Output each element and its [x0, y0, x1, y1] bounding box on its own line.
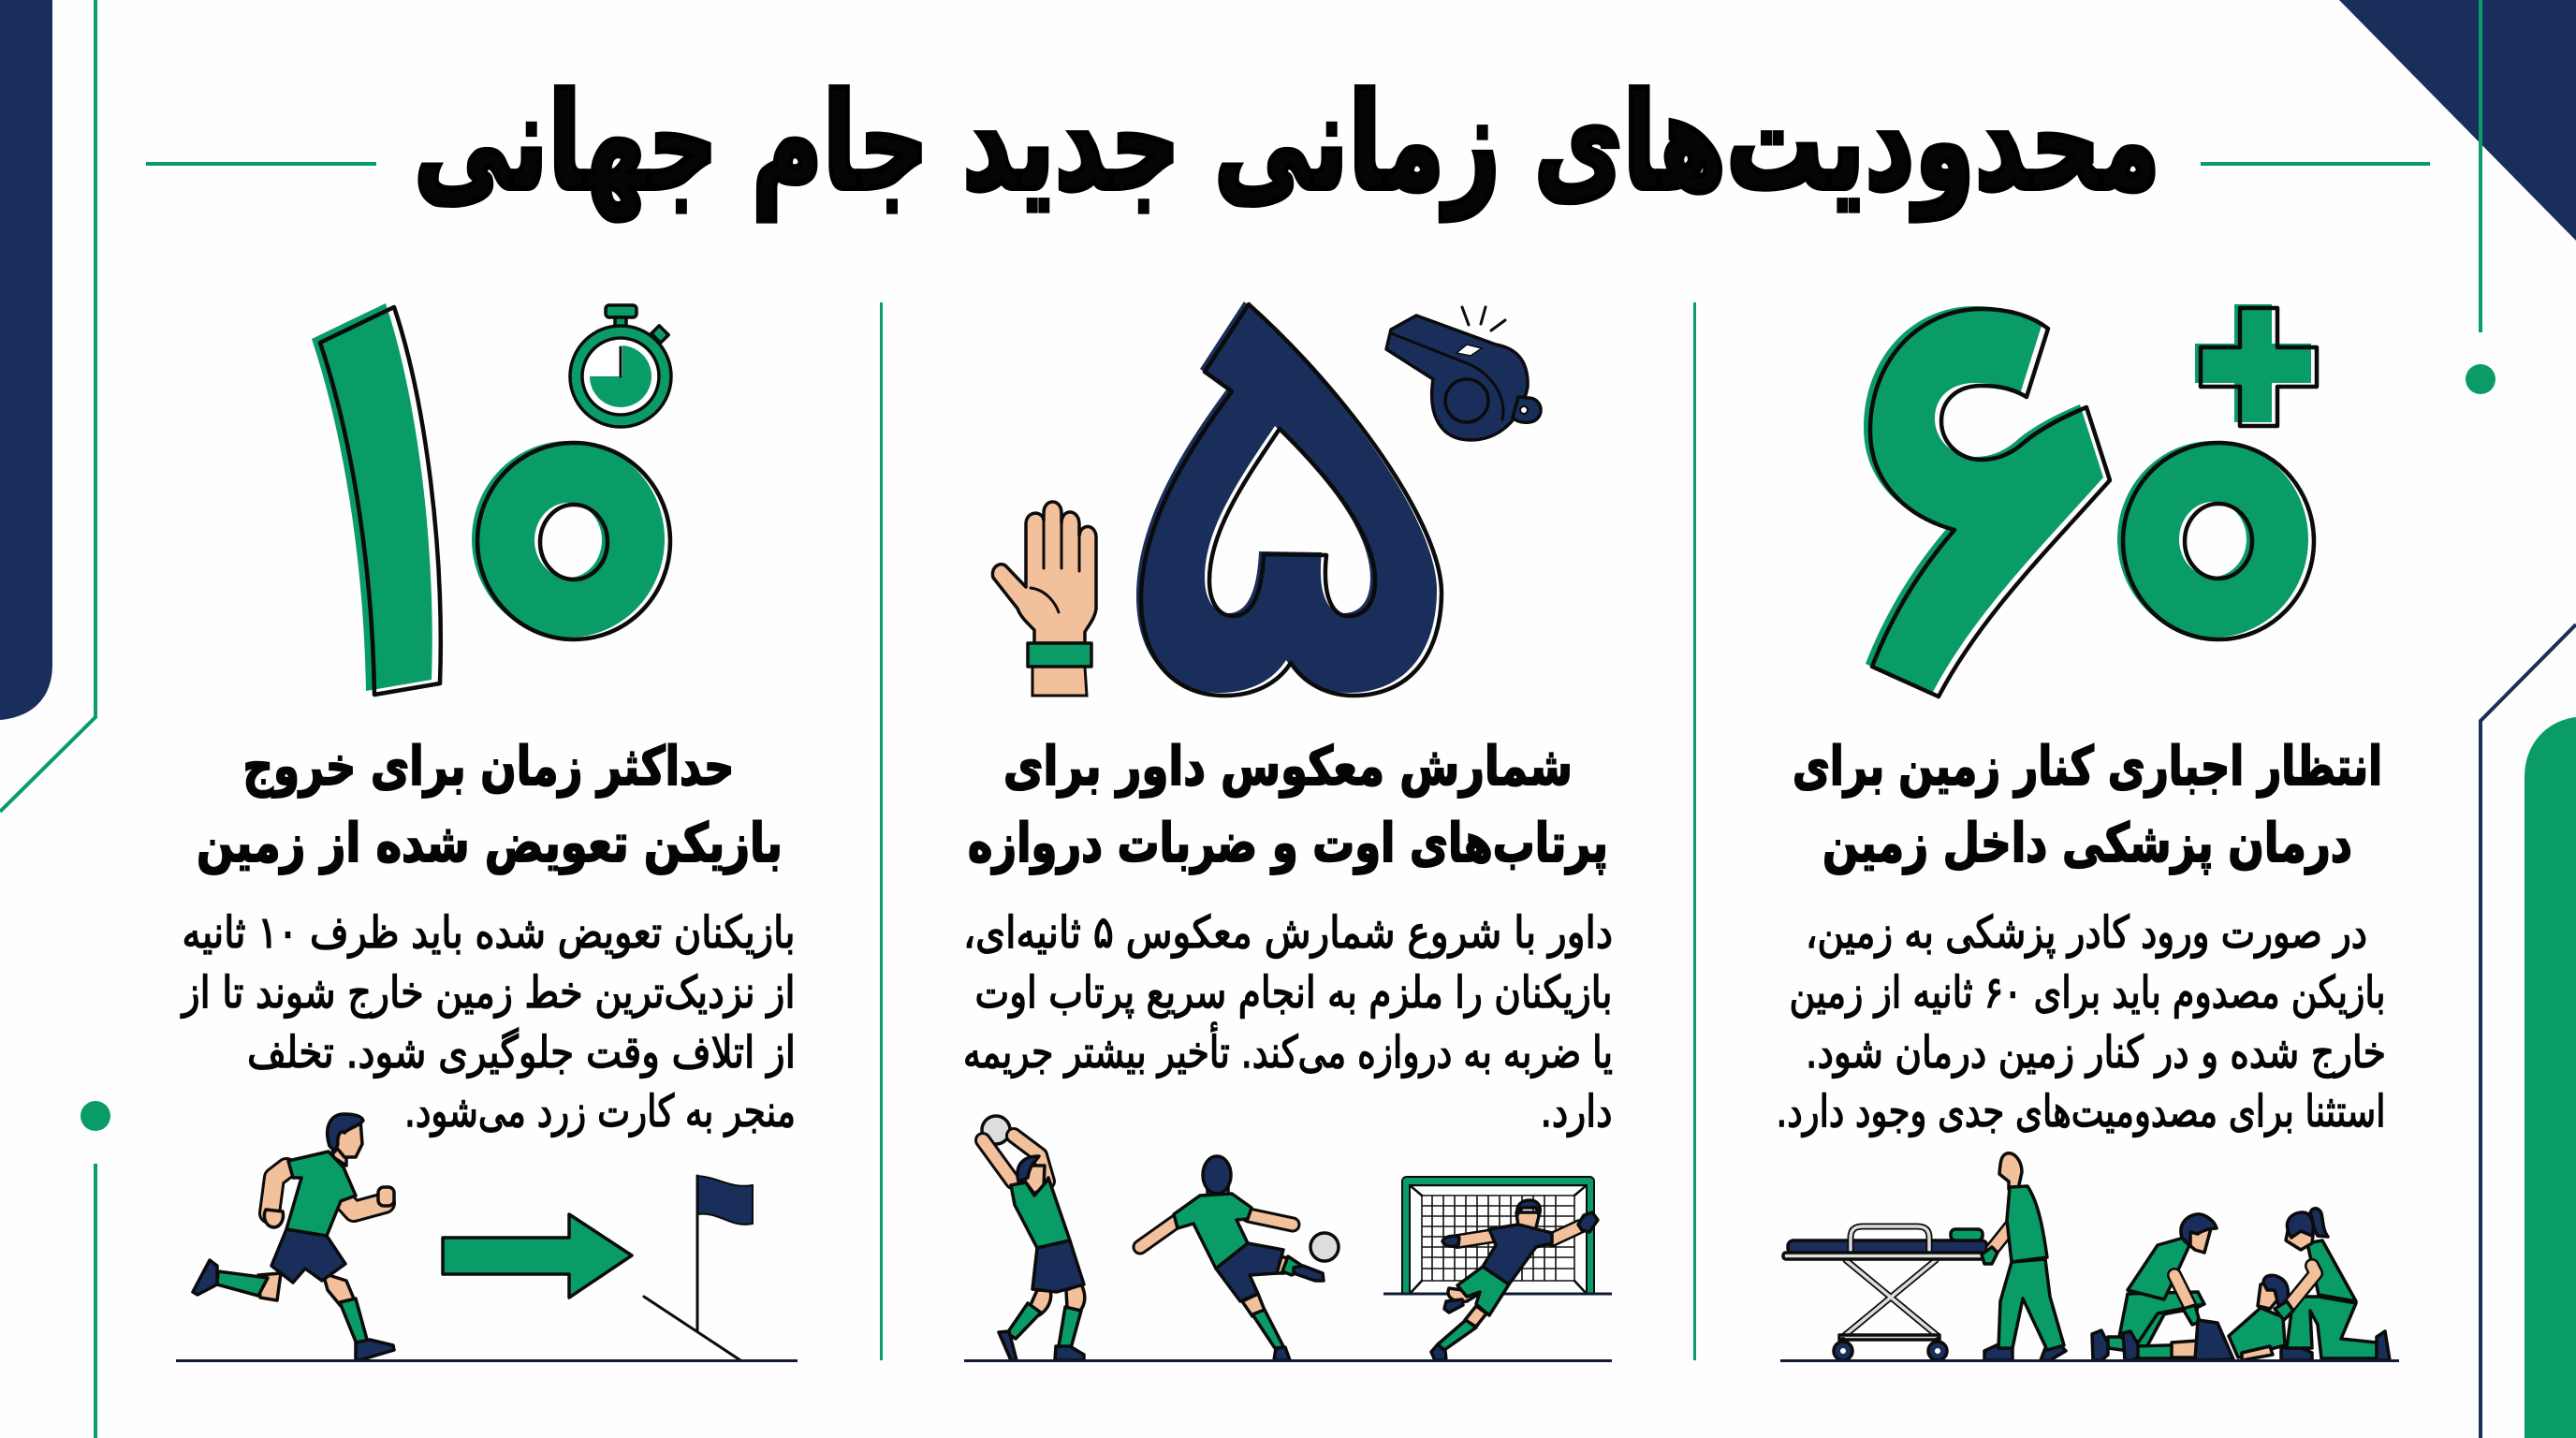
heading: پرتاب‌های اوت و ضربات دروازه — [968, 813, 1608, 874]
big number 60 — [1864, 306, 2314, 697]
body text: استثنا برای مصدومیت‌های جدی وجود دارد. — [1777, 1086, 2385, 1137]
right green side bar — [2525, 717, 2576, 1438]
illustration: medics treating injured player — [2092, 1209, 2390, 1360]
left decorative green line — [0, 0, 95, 812]
heading — [1793, 736, 2382, 874]
arrow — [443, 1214, 632, 1298]
left navy side bar — [0, 0, 52, 720]
heading — [968, 736, 1608, 874]
left decorative dot and line — [80, 1101, 110, 1438]
illustration: goal with goalkeeper — [1383, 1177, 1612, 1360]
heading — [197, 736, 783, 874]
illustration: kicking player — [1140, 1156, 1339, 1360]
heading: انتظار اجباری کنار زمین برای — [1793, 736, 2382, 798]
icon: raised hand with wristband — [992, 502, 1096, 696]
body text: دارد. — [1541, 1086, 1612, 1137]
right decorative navy line — [2481, 624, 2576, 1438]
icon: stopwatch — [570, 305, 671, 427]
body text: داور با شروع شمارش معکوس ۵ ثانیه‌ای، — [963, 907, 1613, 959]
icon: corner flag — [644, 1176, 753, 1360]
icon: whistle — [1386, 307, 1541, 440]
ground line — [964, 1359, 1612, 1362]
body text: بازیکنان تعویض شده باید ظرف ۱۰ ثانیه — [182, 907, 796, 959]
body text — [181, 907, 796, 1137]
illustration: running player — [193, 1114, 394, 1360]
heading: حداکثر زمان برای خروج — [243, 736, 734, 798]
ground line — [176, 1359, 798, 1362]
heading: درمان پزشکی داخل زمین — [1822, 813, 2352, 874]
body text: منجر به کارت زرد می‌شود. — [404, 1086, 796, 1137]
body text — [1777, 907, 2386, 1137]
top right navy corner — [2339, 0, 2576, 241]
ground line — [1780, 1359, 2399, 1362]
body text — [963, 907, 1613, 1137]
big number 5 — [1136, 301, 1442, 696]
panel: 10 seconds substitution — [176, 303, 798, 1362]
body text: بازیکن مصدوم باید برای ۶۰ ثانیه از زمین — [1790, 967, 2385, 1019]
illustration: medic pushing stretcher — [1982, 1153, 2066, 1360]
body text: خارج شده و در کنار زمین درمان شود. — [1806, 1027, 2386, 1078]
heading: بازیکن تعویض شده از زمین — [197, 813, 783, 874]
heading: شمارش معکوس داور برای — [1003, 736, 1573, 798]
big number 10 — [312, 303, 670, 695]
body text: از نزدیک‌ترین خط زمین خارج شوند تا از — [181, 967, 795, 1019]
illustration: stretcher — [1783, 1226, 1987, 1360]
body text: از اتلاف وقت جلوگیری شود. تخلف — [247, 1027, 796, 1078]
body text: بازیکنان را ملزم به انجام سریع پرتاب اوت — [975, 967, 1612, 1019]
right decorative green line and dot — [2466, 0, 2496, 394]
body text: یا ضربه به دروازه می‌کند. تأخیر بیشتر جریمه — [963, 1021, 1613, 1078]
illustration: throw-in player — [982, 1116, 1085, 1360]
panel: 5 second countdown — [963, 301, 1613, 1362]
icon: medical cross — [2195, 304, 2317, 426]
column dividers — [880, 302, 1696, 1360]
panel: 60 seconds medical — [1777, 304, 2399, 1362]
body text: در صورت ورود کادر پزشکی به زمین، — [1806, 907, 2367, 959]
